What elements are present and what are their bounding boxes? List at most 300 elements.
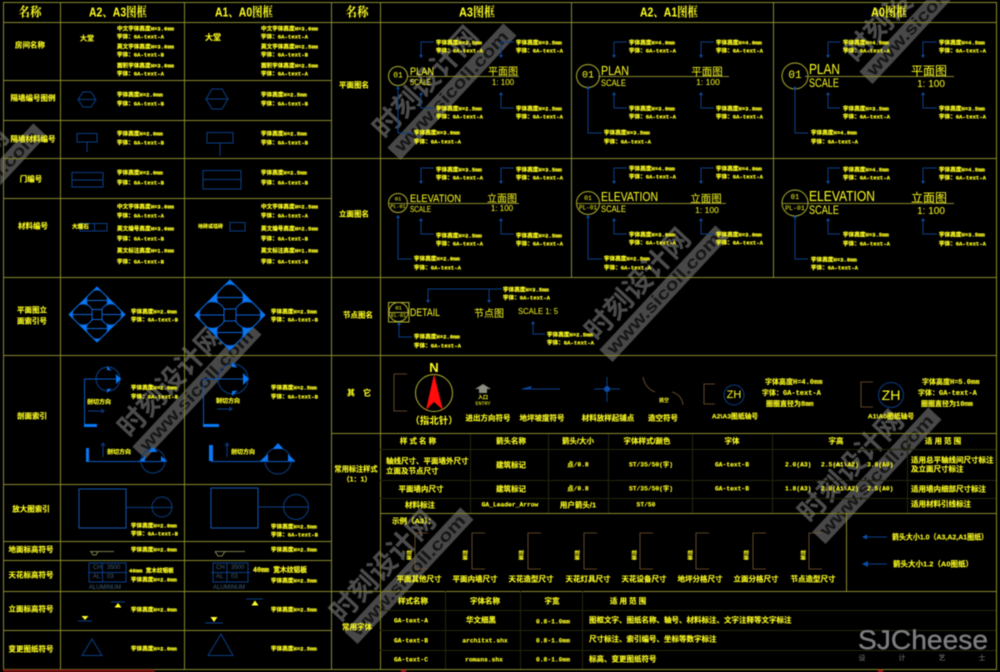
plan title A2 A1 xyxy=(576,38,764,146)
table row 1: 2.0(A3) xyxy=(785,462,811,468)
plan title A2 A1: 平面图 xyxy=(691,66,723,78)
table row 3: 用户箭头/1 xyxy=(560,500,596,510)
callout: plan A0 bottom left: 字体高度H=3.5mm xyxy=(843,104,890,112)
icon: entry arrow: 进出方向符号 xyxy=(466,412,511,422)
row: detail title: 01 xyxy=(395,304,402,312)
callout: plan A2 number: 字体高度H=3.5mm xyxy=(604,128,651,136)
row: detail title xyxy=(343,286,595,350)
row: section index symbols: 字体：GA-text-B xyxy=(131,392,179,400)
callout: elevation A2 number xyxy=(586,215,652,272)
icon: section vertical small: 剖切方向 xyxy=(87,398,111,406)
row: room name: 字体：GA-text-B xyxy=(117,50,165,58)
row: ceiling level symbol: 03 xyxy=(107,574,114,580)
icon: material setout point: 材料放样起铺点 xyxy=(582,412,635,422)
row: partition material number: 隔墙材料编号 xyxy=(10,134,56,144)
icon: floor slope symbol: 地坪坡度符号 xyxy=(520,412,565,422)
plan title A2 A1: 01 xyxy=(582,70,594,82)
row: partition material number: 字体高度H=2.5mm xyxy=(261,130,308,138)
row: floor level symbol: 地面标高符号 xyxy=(8,544,54,554)
callout: elevation A3 top right xyxy=(499,166,564,184)
table row 3: GA_Leader_Arrow xyxy=(482,502,539,508)
icon: section horizontal small xyxy=(86,443,167,473)
example: plan inner wall: 平面内墙尺寸 xyxy=(452,574,498,584)
callout: elevation A0 number: 字体：GA-text-A xyxy=(811,264,859,272)
row: plan and elevation index symbols: 字体：GA-text-B xyxy=(131,316,179,324)
elevation title A0: SCALE xyxy=(809,205,839,217)
font row C: GA-text-C xyxy=(394,656,428,664)
row: door number: 字体：GA-text-B xyxy=(261,178,309,186)
dimension examples xyxy=(392,516,836,584)
elevation title A0: PL-01 xyxy=(785,205,805,212)
callout: plan A3 top left: 字体：GA-text-A xyxy=(436,46,484,54)
callout: elevation A2 top right: 字体高度H=4.0mm xyxy=(716,164,763,172)
row: room name: 中文字体高度H=3.0mm xyxy=(117,24,175,32)
row: partition material number: 字体高度H=2.0mm xyxy=(117,130,164,138)
elevation title A3: ELEVATION xyxy=(410,193,461,205)
plan title A0 xyxy=(782,38,987,146)
logo: SJCheese: 设 xyxy=(858,653,866,663)
callout: plan A3 bottom right: 字体高度H=2.5mm xyxy=(516,104,563,112)
icon: void symbol: 造空符号 xyxy=(648,412,678,422)
watermark: www.sicoll.com xyxy=(815,411,937,540)
row: floor level symbol: 字体高度H=2.5mm xyxy=(271,546,318,554)
table row 1: 建筑标记 xyxy=(496,460,526,470)
row: enlarged plan index: 放大图索引 xyxy=(12,504,50,514)
logo: SJCheese: 艺 xyxy=(938,653,946,663)
callout: plan A3 top right: 字体：GA-text-A xyxy=(516,46,564,54)
table row 2: 适用墙内细部尺寸标注 xyxy=(911,484,986,494)
elevation title A3: PL-01 xyxy=(390,204,406,210)
watermark xyxy=(109,301,261,459)
icon: floor slope symbol xyxy=(520,386,565,422)
watermark xyxy=(321,486,473,644)
elevation title A0: 01 xyxy=(791,194,799,202)
row: ceiling level symbol: 40mm 宽木纹铝板 xyxy=(253,565,307,575)
plan title A3: PLAN xyxy=(410,66,434,78)
row: room name xyxy=(15,24,319,78)
row: door number xyxy=(20,168,309,189)
row: door number: 门编号 xyxy=(20,174,43,184)
callout: detail number height xyxy=(397,322,462,350)
row: room name: 字体：GA-text-A xyxy=(117,32,165,40)
icon: axis number A2 A3: ZH xyxy=(727,389,741,401)
callout: elevation A3 top left xyxy=(419,166,484,184)
row: ceiling level symbol: 3500 xyxy=(231,565,245,571)
callout: elevation A2 top left xyxy=(612,164,677,184)
callout: elevation A2 top right xyxy=(699,164,764,184)
row label: elevation title: 立面图名 xyxy=(339,208,369,218)
font row C: romans.shx xyxy=(465,656,503,664)
callout: elevation A3 bottom right xyxy=(499,218,564,248)
callout: plan A3 bottom right xyxy=(499,92,564,120)
icon: dimension bracket xyxy=(394,374,407,411)
row: partition number legend: 字体：GA-text-B xyxy=(117,100,165,108)
icon: axis number A2 A3 xyxy=(704,377,822,420)
callout: plan A0 top left: 字体高度H=4.5mm xyxy=(843,38,890,46)
callout: elevation A3 bottom left xyxy=(419,218,484,248)
callout: elevation A3 top left: 字体高度H=3.5mm xyxy=(436,166,483,174)
plan title A2 A1: PLAN xyxy=(601,63,629,78)
plan title A3: 平面图 xyxy=(488,66,518,78)
icon: axis number A2 A3: 字体：GA-text-A xyxy=(762,388,822,398)
icon: void symbol: 挑空 xyxy=(659,397,669,404)
watermark: www.sicoll.com xyxy=(390,27,512,156)
row: room name: 大堂 xyxy=(80,34,94,42)
icon: section horizontal large xyxy=(209,443,295,474)
icon: axis number A2 A3: 圈圈直径为8mm xyxy=(766,399,814,409)
example: ceiling shape: 标注 xyxy=(518,550,525,560)
callout: elevation A0 number: 字体高度H=3.0mm xyxy=(811,256,858,264)
plan title A2 A1: SCALE xyxy=(601,78,626,89)
example: node shape: 标注 xyxy=(800,550,807,560)
arrow: size 1.2: 箭头大小1.2（A0图纸） xyxy=(893,558,973,568)
callout: plan A2 bottom left: 字体高度H=3.0mm xyxy=(629,104,676,112)
example: floor grid: 标注 xyxy=(687,550,694,560)
plan title A3: 1: 100 xyxy=(492,78,515,87)
callout: elevation A2 top left: 字体高度H=4.0mm xyxy=(629,164,676,172)
callout: elevation A2 number: 字体：GA-text-A xyxy=(604,264,652,272)
callout: detail title height: 字体：GA-text-A xyxy=(503,294,551,302)
row: room name: 字体：GA-text-A xyxy=(261,32,309,40)
row: elevation level symbol: 字体高度H=2.0mm xyxy=(131,606,178,614)
row: ceiling level symbol: AL xyxy=(93,574,101,580)
watermark: 时刻设计网 xyxy=(792,405,910,528)
row: plan and elevation index symbols xyxy=(17,280,319,350)
icon: north arrow xyxy=(410,360,458,427)
row: plan and elevation index symbols: 字体高度H=2.5mm xyxy=(271,308,318,316)
elevation title A3: 01 xyxy=(395,196,402,202)
logo: SJCheese: SJCheese xyxy=(858,625,988,655)
logo: SJCheese: 士 xyxy=(978,653,986,663)
row: section index symbols: 字体高度H=2.5mm xyxy=(271,384,318,392)
table: dimension styles: （1：1） xyxy=(343,476,371,484)
font row A: 华文细黑 xyxy=(466,614,496,624)
table header row: 字体 xyxy=(724,436,740,446)
font row B xyxy=(394,634,717,644)
table row 3 xyxy=(405,498,971,510)
plan title A0: PLAN xyxy=(809,61,840,78)
table row 2: ST/35/50(字) xyxy=(629,484,673,492)
callout: plan A2 bottom right: 字体：GA-text-A xyxy=(716,112,764,120)
callout: plan A0 bottom right: 字体：GA-text-A xyxy=(939,112,987,120)
callout: elevation A0 bottom right xyxy=(921,218,987,248)
icon: section horizontal large: 剖切方向 xyxy=(231,448,255,456)
row: partition material number: 字体：GA-text-B xyxy=(261,138,309,146)
row: ceiling level symbol: 40mm 宽木纹铝板 xyxy=(129,566,174,574)
row: detail title: SCALE 1: 5 xyxy=(518,307,559,316)
elevation title A0: 1: 100 xyxy=(917,206,945,217)
plan title A0: 01 xyxy=(788,70,802,82)
watermark xyxy=(789,386,941,544)
callout: plan A2 bottom left: 字体：GA-text-A xyxy=(629,112,677,120)
table row 1: 点/0.8 xyxy=(567,460,589,468)
table row 2: 点/0.8 xyxy=(567,484,589,492)
row: partition number legend: 字体：GA-text-B xyxy=(261,100,309,108)
callout: plan A3 top left xyxy=(419,38,484,58)
table row 2 xyxy=(398,484,986,494)
row: partition material number: 字体：GA-text-B xyxy=(117,138,165,146)
row: material number: 中文字体高度H=3.0mm xyxy=(117,202,175,210)
row: room name: 中文字体高度H=3.0mm xyxy=(261,24,319,32)
font row A: GA-text-A xyxy=(394,618,428,624)
callout: plan A3 bottom left: 字体：GA-text-A xyxy=(436,112,484,120)
row: plan and elevation index symbols: 字体高度H=2.0mm xyxy=(131,308,178,316)
row: other symbols: 其 它 xyxy=(347,388,371,398)
row: room name: 字体：GA-text-A xyxy=(117,70,165,78)
elevation title A3: 立面图 xyxy=(487,192,517,205)
row: ceiling level symbol: 3500 xyxy=(107,565,121,571)
table: common fonts: 常用字体 xyxy=(342,622,372,632)
callout: plan A0 number: 字体高度H=4.0mm xyxy=(811,128,858,136)
callout: elevation A3 bottom left: 字体高度H=2.5mm xyxy=(436,232,483,240)
icon: axis number A1 A0: 字体高度H=5.0mm xyxy=(922,377,979,387)
row: plan and elevation index symbols: 面索引号 xyxy=(17,316,47,326)
plan title A3: SCALE xyxy=(410,78,431,87)
callout: elevation A3 number xyxy=(396,215,462,272)
example: ceiling equipment xyxy=(622,533,667,584)
icon: entry arrow: 入口 xyxy=(478,395,488,401)
table row 2: 2.5(A0) xyxy=(867,486,893,492)
row: floor level symbol: 字体高度H=2.0mm xyxy=(131,546,178,554)
table row 1: 适用总平轴线间尺寸标注 xyxy=(911,454,994,464)
elevation title A0: ELEVATION xyxy=(809,188,875,205)
callout: elevation A3 number: 字体：GA-text-A xyxy=(414,264,462,272)
callout: elevation A0 top left: 字体：GA-text-A xyxy=(843,174,891,182)
example: ceiling lamp: 标注 xyxy=(574,550,581,560)
table row 1: 及立面尺寸标注 xyxy=(911,464,964,474)
elevation title A2 A1: SCALE xyxy=(601,204,626,215)
arrow size legend xyxy=(862,532,988,568)
callout: elevation A0 top right: 字体：GA-text-A xyxy=(939,174,987,182)
font row A: 0.8-1.0mm xyxy=(536,618,570,626)
row: room name: 英文字体高度H=3.0mm xyxy=(117,42,175,50)
callout: detail number height: 字体：GA-text-A xyxy=(414,342,462,350)
icon: axis number A1 A0: 圈圈直径为10mm xyxy=(921,399,973,409)
row label: plan title: 平面图名 xyxy=(339,80,369,90)
row: partition number legend: 字体高度H=2.0mm xyxy=(117,90,164,98)
plan title A0: SCALE xyxy=(809,78,839,90)
plan title A3 xyxy=(388,38,564,146)
callout: plan A0 top right: 字体高度H=4.5mm xyxy=(939,38,986,46)
icon: north arrow: （指北针） xyxy=(410,415,458,427)
callout: elevation A0 number xyxy=(793,215,859,272)
row: ceiling level symbol: CH xyxy=(93,565,102,571)
callout: detail title height: 字体高度H=3.5mm xyxy=(503,286,550,294)
row: other symbols xyxy=(347,360,979,427)
icon: section vertical small xyxy=(84,366,121,427)
row: revision symbol: 字体高度H=2.5mm xyxy=(271,644,318,652)
row: material number: 字体：GA-text-B xyxy=(117,258,165,266)
row: elevation level symbol: 立面标高符号 xyxy=(8,604,54,614)
callout: elevation A0 bottom left: 字体高度H=3.5mm xyxy=(843,230,890,238)
callout: elevation A2 bottom left: 字体高度H=3.0mm xyxy=(629,230,676,238)
callout: elevation A0 bottom left: 字体：GA-text-A xyxy=(843,240,891,248)
bottom edge red marks xyxy=(3,670,883,672)
callout: detail scale height: 字体：GA-text-A xyxy=(547,338,595,346)
callout: plan A0 top right xyxy=(921,38,987,58)
icon: axis number A1 A0: ZH xyxy=(882,387,900,403)
callout: elevation A2 bottom right: 字体高度H=3.0mm xyxy=(716,230,763,238)
fonts header: 字体名称 xyxy=(470,596,500,606)
row: material number: 英文标注高度H=1.8mm xyxy=(117,246,175,254)
callout: elevation A3 bottom right: 字体高度H=2.5mm xyxy=(516,232,563,240)
plan title A3: 01 xyxy=(393,72,403,80)
row: section index symbols: 剖面索引 xyxy=(17,410,47,420)
watermark xyxy=(0,102,46,260)
callout: plan A3 top right: 字体高度H=3.5mm xyxy=(516,38,563,46)
callout: plan A3 bottom left xyxy=(419,92,484,120)
callout: plan A2 top right xyxy=(699,38,764,58)
left table header: A1、A0图框 xyxy=(215,4,273,20)
row: partition material number xyxy=(10,130,309,156)
example: node shape: 节点造型尺寸 xyxy=(790,574,836,584)
row: material number: 英文编号高度H=3.0mm xyxy=(117,224,175,232)
elevation title A3: SCALE xyxy=(410,205,431,214)
icon: material setout point xyxy=(582,377,635,422)
font row B: architxt.shx xyxy=(462,638,508,644)
font row B: GA-text-B xyxy=(394,638,428,644)
row: ceiling level symbol: 03 xyxy=(231,574,238,580)
callout: elevation A2 bottom right: 字体：GA-text-A xyxy=(716,238,764,246)
row: ceiling level symbol: AL xyxy=(216,574,224,580)
row: ceiling level symbol: 天花标高符号 xyxy=(8,570,54,580)
right table header xyxy=(346,4,907,20)
icon: north arrow: N xyxy=(429,360,439,375)
table row 2: GA-text-B xyxy=(715,486,749,492)
icon: axis number A2 A3: 字体高度H=4.0mm xyxy=(765,377,822,387)
table row 2: 平面墙内尺寸 xyxy=(398,484,444,494)
row: room name: 面积字体高度H=3.0mm xyxy=(117,62,175,70)
table row 3: 材料标注 xyxy=(405,500,435,510)
row: door number: 字体：GA-text-B xyxy=(117,178,165,186)
watermark: www.sicoll.com xyxy=(602,229,724,358)
callout: elevation A3 top right: 字体高度H=3.5mm xyxy=(516,166,563,174)
elevation title A3 xyxy=(388,166,564,272)
watermark: 时刻设计网 xyxy=(112,320,230,443)
callout: elevation A2 top right: 字体：GA-text-A xyxy=(716,172,764,180)
table header row: 适 用 范 围 xyxy=(925,436,961,446)
table row 1: ST/35/50(字) xyxy=(629,460,673,468)
logo: SJCheese: 计 xyxy=(898,653,906,663)
callout: plan A3 top left: 字体高度H=3.5mm xyxy=(436,38,483,46)
row: material number: 字体：GA-text-A xyxy=(261,212,309,220)
callout: plan A2 top right: 字体：GA-text-A xyxy=(716,46,764,54)
table: dimension styles xyxy=(334,436,994,510)
icon: entry arrow xyxy=(466,384,511,422)
example: plan other xyxy=(396,533,442,584)
callout: plan A0 top right: 字体：GA-text-A xyxy=(939,46,987,54)
callout: plan A2 bottom right: 字体高度H=3.0mm xyxy=(716,104,763,112)
watermark: www.sicoll.com xyxy=(135,326,257,455)
callout: elevation A3 number: 字体高度H=2.0mm xyxy=(414,254,461,262)
row: material number: 中文字体高度H=2.5mm xyxy=(261,202,319,210)
row: enlarged plan index: 字体：GA-text-B xyxy=(131,530,179,538)
row: plan and elevation index symbols: 字体：GA-text-B xyxy=(271,316,319,324)
watermark: 时刻设计网 xyxy=(579,223,697,346)
row: material number: 英文编号高度H=2.5mm xyxy=(261,224,319,232)
callout: elevation A0 bottom right: 字体高度H=3.5mm xyxy=(939,230,986,238)
callout: plan A3 number: 字体高度H=3.0mm xyxy=(414,128,461,136)
callout: plan A0 top left xyxy=(826,38,891,58)
icon: section vertical large xyxy=(203,362,249,427)
table row 3: ST/50 xyxy=(637,502,656,508)
row: ceiling level symbol: ALUMINUM xyxy=(213,585,245,591)
callout: elevation A3 bottom left: 字体：GA-text-A xyxy=(436,240,484,248)
elevation title A2 A1 xyxy=(576,164,764,272)
right table header: A2、A1图框 xyxy=(640,4,698,20)
example: floor grid xyxy=(678,533,723,584)
icon: index diamond small xyxy=(69,287,125,342)
row: detail title: EL-01 xyxy=(391,313,406,319)
row: room name: 面积字体高度H=2.5mm xyxy=(261,62,319,70)
row: revision symbol: 字体高度H=2.0mm xyxy=(131,644,178,652)
row: material number xyxy=(18,202,319,266)
row: elevation level symbol xyxy=(8,599,318,623)
row: ceiling level symbol: 字体高度H=2.0mm xyxy=(131,576,178,584)
right table header: A0图框 xyxy=(871,4,907,20)
table header row: 箭头名称 xyxy=(496,436,526,446)
right table header: 名称 xyxy=(346,4,369,20)
plan title A0: 1: 100 xyxy=(917,79,945,90)
row: door number: 字体高度H=2.0mm xyxy=(117,168,164,176)
callout: elevation A0 top right xyxy=(921,166,987,184)
left table header: 名称 xyxy=(18,4,42,20)
callout: plan A3 number xyxy=(396,86,462,146)
row: room name: 大堂 xyxy=(205,32,221,42)
example: plan inner wall xyxy=(452,533,498,584)
table row 1: 轴线尺寸、平面墙外尺寸 xyxy=(386,456,469,466)
row: enlarged plan index xyxy=(12,488,319,538)
callout: plan A3 top right xyxy=(499,38,564,58)
row: material number: 字体：GA-text-B xyxy=(261,234,309,242)
row: floor level symbol xyxy=(8,544,318,556)
row: section index symbols: 字体：GA-text-B xyxy=(271,392,319,400)
callout: elevation A3 top right: 字体：GA-text-A xyxy=(516,174,564,182)
left table header xyxy=(18,4,273,20)
table: common fonts xyxy=(342,596,792,664)
table row 2: 2.0(A1\A2) xyxy=(821,486,859,492)
row: material number: 大理石 xyxy=(72,222,89,230)
callout: detail number height: 字体高度H=2.0mm xyxy=(414,332,461,340)
callout: elevation A2 bottom right xyxy=(699,218,764,246)
row: ceiling level symbol xyxy=(8,563,318,591)
watermark xyxy=(576,204,728,362)
elevation title A0 xyxy=(782,166,987,272)
icon: axis number A1 A0 xyxy=(861,377,979,420)
row: detail title: 节点图名 xyxy=(343,310,373,320)
table: dimension styles: 常用标注样式 xyxy=(334,464,378,474)
callout: elevation A0 top left xyxy=(826,166,891,184)
table row 1 xyxy=(386,454,994,476)
font row A: 图框文字、图纸名称、轴号、材料标注、文字注释等文字标注 xyxy=(589,614,792,624)
callout: detail scale height xyxy=(531,321,595,346)
callout: plan A0 number: 字体：GA-text-A xyxy=(811,138,859,146)
callout: plan A0 number xyxy=(793,86,859,146)
watermark xyxy=(836,0,988,84)
callout: elevation A3 bottom right: 字体：GA-text-A xyxy=(516,240,564,248)
example: ceiling lamp: 天花灯具尺寸 xyxy=(566,574,611,584)
row: plan and elevation index symbols: 平面图立 xyxy=(17,304,47,314)
example: elevation grid: 标注 xyxy=(743,550,750,560)
callout: elevation A0 bottom right: 字体：GA-text-A xyxy=(939,240,987,248)
dimension examples: 示例（A3）： xyxy=(392,516,435,526)
font row C: 标高、变更图纸符号 xyxy=(589,654,657,664)
row: detail title: DETAIL xyxy=(410,307,440,319)
example: ceiling equipment: 标注 xyxy=(631,550,638,560)
callout: detail scale height: 字体高度H=2.5mm xyxy=(547,330,594,338)
example: ceiling lamp xyxy=(566,533,611,584)
example: ceiling shape: 天花造型尺寸 xyxy=(508,574,554,584)
